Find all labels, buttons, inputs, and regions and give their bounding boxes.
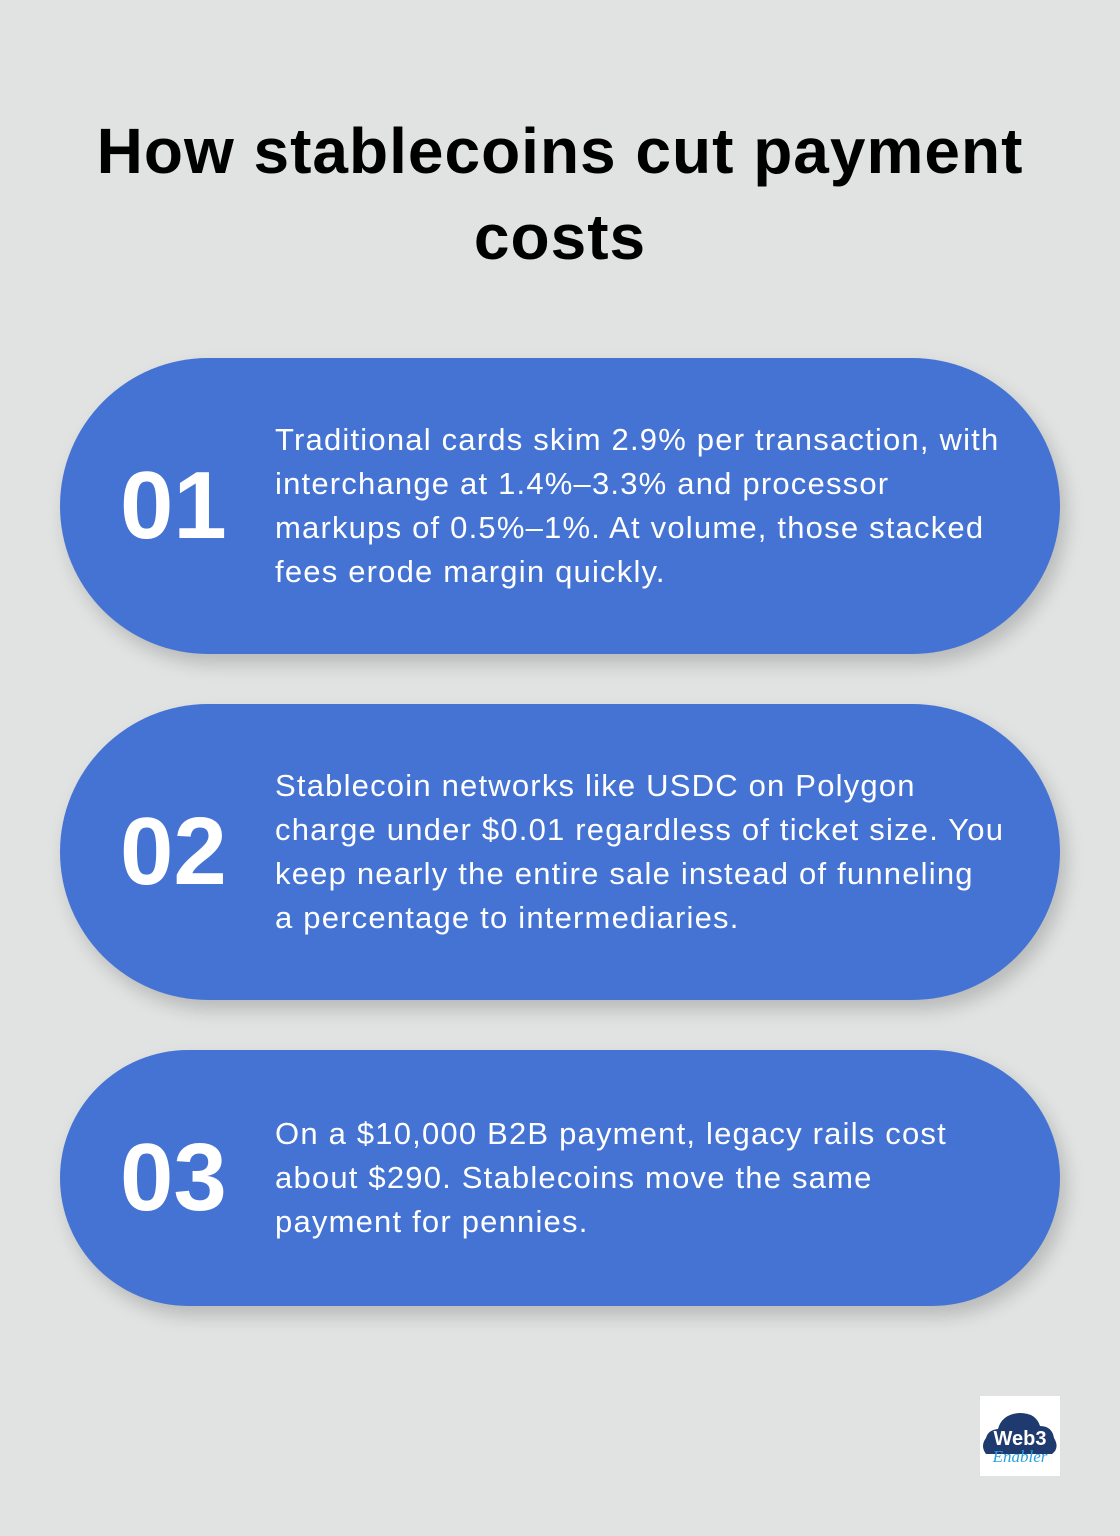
logo: Web3 — [994, 1428, 1046, 1450]
number 01: 01 — [120, 452, 227, 559]
text 01 — [275, 422, 999, 589]
card 02 — [60, 704, 1060, 1000]
text 02: charge under $0.01 regardless of ticket size. You — [275, 812, 1004, 847]
text 03 — [275, 1116, 947, 1239]
text 02: keep nearly the entire sale instead of funneling — [275, 856, 974, 891]
text 02: Stablecoin networks like USDC on Polygon — [275, 768, 916, 803]
text 01: fees erode margin quickly. — [275, 554, 666, 589]
title: How stablecoins cut payment — [97, 115, 1023, 187]
text 03: On a $10,000 B2B payment, legacy rails cost — [275, 1116, 947, 1151]
logo: Enabler — [992, 1447, 1048, 1466]
text 01: markups of 0.5%–1%. At volume, those stacked — [275, 510, 984, 545]
card 01 — [60, 358, 1060, 654]
text 02: a percentage to intermediaries. — [275, 900, 740, 935]
text 02 — [275, 768, 1004, 935]
text 01: interchange at 1.4%–3.3% and processor — [275, 466, 889, 501]
text 03: payment for pennies. — [275, 1204, 589, 1239]
title — [97, 115, 1023, 273]
number 03: 03 — [120, 1124, 227, 1231]
card 03 — [60, 1050, 1060, 1306]
text 03: about $290. Stablecoins move the same — [275, 1160, 873, 1195]
title: costs — [474, 201, 646, 273]
number 02: 02 — [120, 798, 227, 905]
logo — [980, 1396, 1060, 1476]
text 01: Traditional cards skim 2.9% per transaction, with — [275, 422, 999, 457]
